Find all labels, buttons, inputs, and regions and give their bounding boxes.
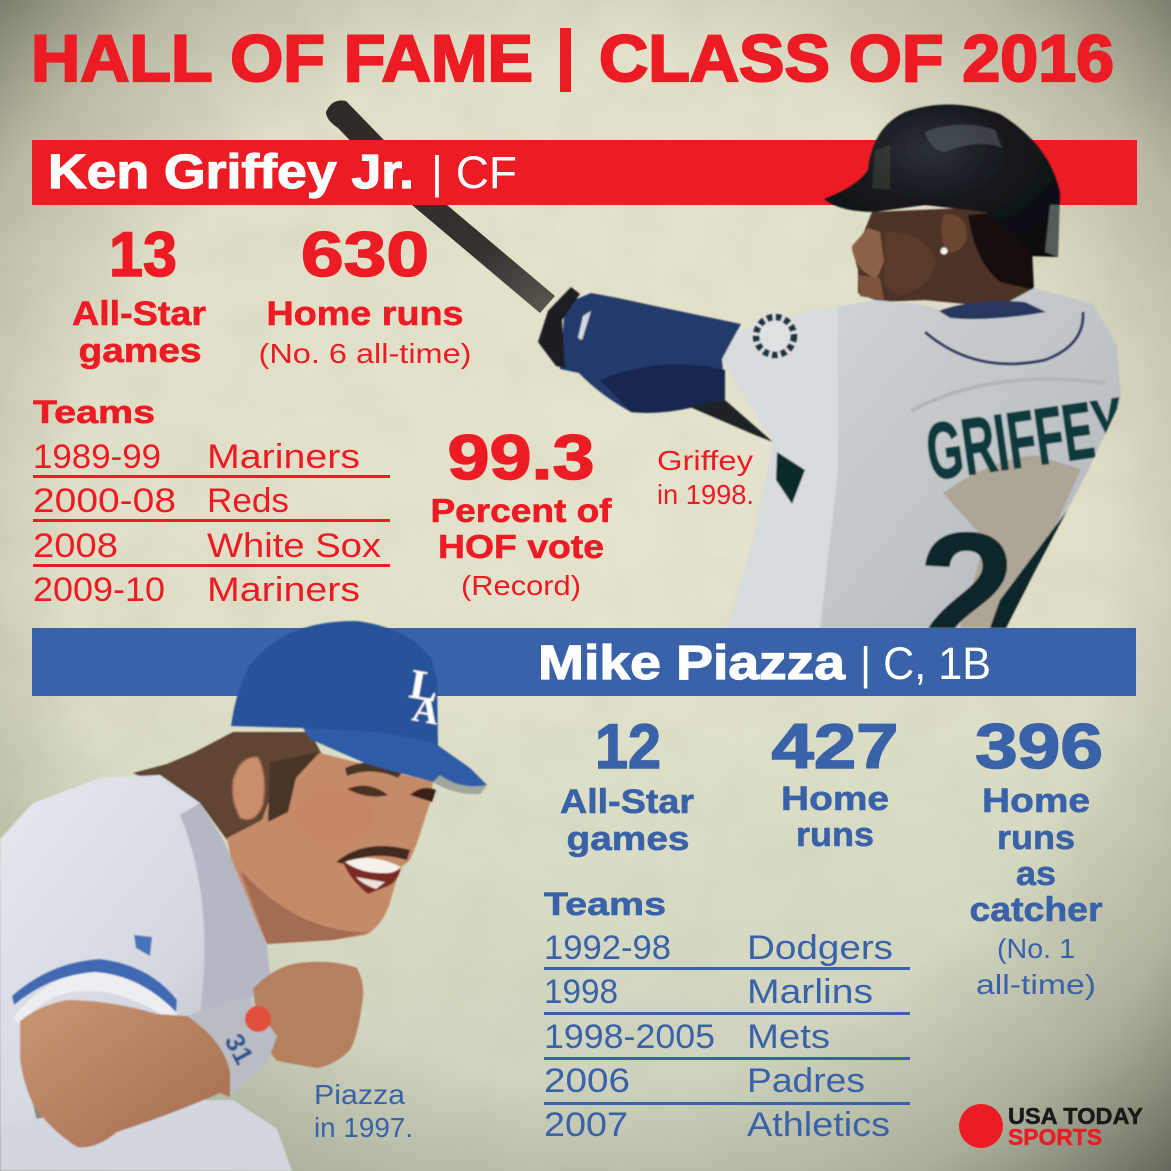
table: Piazza teams: 1998-2005	[544, 1018, 715, 1056]
sleeve stripe	[12, 959, 177, 1012]
caption: Griffey in 1998	[657, 445, 754, 510]
caption: Griffey in 1998: in 1998.	[657, 479, 754, 510]
stats: Piazza home runs as catcher: 396	[975, 712, 1103, 782]
cap crown	[231, 621, 438, 746]
jersey	[0, 775, 270, 1128]
teeth	[345, 858, 401, 873]
stats: Griffey HOF vote	[430, 423, 613, 601]
table: Griffey teams: 2008	[33, 527, 118, 565]
photo: Piazza crouching	[0, 621, 487, 1171]
photo: Griffey batting	[537, 104, 1121, 628]
glove	[538, 287, 580, 368]
table: Piazza teams: Mets	[747, 1018, 830, 1056]
mustache	[336, 846, 410, 864]
table: Piazza teams: Teams	[544, 886, 666, 922]
LA logo: A	[410, 688, 442, 732]
stats: Piazza home runs: 427	[772, 712, 898, 782]
wristband	[187, 996, 277, 1097]
logo: USA Today Sports: USA TODAY	[1008, 1103, 1143, 1129]
table: Piazza teams: Dodgers	[747, 929, 893, 967]
piping	[925, 312, 1083, 364]
stats: Piazza All-Star games: 12	[595, 712, 661, 782]
caption: Piazza in 1997: Piazza	[314, 1079, 405, 1110]
table: Piazza teams: Athletics	[747, 1106, 890, 1144]
stats: Griffey All-Star games: 13	[109, 220, 177, 290]
sponsor mark	[134, 935, 152, 956]
stats: Griffey home runs: 630	[301, 220, 429, 290]
wrist highlight	[578, 311, 591, 340]
logo: USA Today Sports: SPORTS	[1008, 1124, 1102, 1150]
neck and head	[852, 205, 1034, 306]
legs	[0, 1100, 292, 1171]
face	[227, 753, 433, 944]
sleeve patch	[751, 312, 799, 360]
stats: Piazza home runs: Home	[781, 780, 889, 818]
table: Griffey teams: White Sox	[207, 527, 381, 565]
jersey light panel	[722, 305, 838, 628]
stats: Piazza home runs as catcher: Home	[982, 782, 1090, 820]
earring	[940, 248, 948, 254]
stats: Piazza home runs as catcher: runs	[997, 819, 1075, 857]
table: Griffey teams: Mariners	[207, 571, 360, 609]
LA logo: L	[406, 662, 442, 712]
tan patch	[943, 455, 1081, 628]
banner: Ken Griffey Jr.: Ken Griffey Jr.	[48, 146, 414, 199]
table: Griffey teams: Reds	[207, 482, 289, 520]
eyebrow	[345, 762, 402, 778]
stats: Griffey All-Star games: games	[78, 332, 202, 370]
helmet decal	[872, 145, 890, 190]
jersey name	[924, 396, 1120, 628]
ear	[941, 214, 967, 252]
stats: Griffey HOF vote: Percent of	[430, 492, 613, 529]
jaw shadow	[240, 870, 372, 944]
table: Griffey teams: 2000-08	[33, 482, 176, 520]
arm	[20, 1000, 230, 1147]
table: Piazza teams	[544, 886, 910, 1144]
stats: Griffey HOF vote: HOF vote	[438, 528, 604, 565]
face highlight	[852, 228, 884, 280]
table: Griffey teams: Mariners	[207, 438, 360, 476]
table: Piazza teams: 1998	[544, 973, 618, 1011]
banner: Mike Piazza: Mike Piazza	[538, 637, 845, 690]
jersey number: 2	[918, 497, 1016, 689]
table: Griffey teams	[33, 394, 390, 609]
stats: Griffey HOF vote: 99.3	[448, 423, 594, 493]
jersey body	[722, 288, 1121, 628]
wristband logo	[245, 1006, 271, 1032]
table: Piazza teams: Marlins	[747, 973, 873, 1011]
front letters	[776, 452, 805, 504]
stats: Piazza home runs	[772, 712, 898, 854]
eye	[347, 786, 388, 797]
stats: Griffey HOF vote: (Record)	[461, 570, 581, 601]
banner: Ken Griffey Jr.: | CF	[431, 147, 517, 198]
table: Piazza teams: 2006	[544, 1062, 630, 1100]
bat	[326, 100, 555, 313]
table: Griffey teams: Teams	[33, 394, 155, 430]
stats: Piazza home runs as catcher: catcher	[970, 891, 1102, 929]
hair	[968, 210, 1034, 290]
sleeve hem	[13, 970, 177, 1025]
stats: Piazza All-Star games: All-Star	[560, 783, 694, 821]
stats: Griffey home runs: Home runs	[266, 295, 464, 333]
stats: Piazza All-Star games: games	[566, 820, 690, 858]
photo: Piazza crouching: 31	[219, 1029, 259, 1069]
side hair	[268, 752, 320, 822]
title: CLASS OF 2016	[599, 21, 1114, 95]
table: Piazza teams: 1992-98	[544, 929, 671, 967]
table: Griffey teams: 2009-10	[33, 571, 165, 609]
stats: Piazza home runs as catcher: all-time)	[976, 969, 1096, 1000]
second arm	[690, 400, 773, 442]
cheek	[295, 790, 375, 840]
logo: USA Today Sports	[959, 1103, 1143, 1150]
stats: Piazza home runs as catcher	[970, 712, 1103, 1000]
title	[31, 21, 1114, 95]
fist	[253, 962, 363, 1068]
stats: Piazza home runs as catcher: as	[1016, 855, 1056, 893]
banner: Ken Griffey Jr.	[32, 140, 1137, 205]
stats: Piazza home runs as catcher: (No. 1	[997, 933, 1075, 964]
title: HALL OF FAME	[31, 21, 533, 95]
navy sleeve	[560, 293, 741, 413]
table: Piazza teams: Padres	[747, 1062, 865, 1100]
name plate arc	[911, 379, 1105, 411]
helmet highlight	[925, 124, 1002, 152]
table: Piazza teams: 2007	[544, 1106, 628, 1144]
caption: Piazza in 1997: in 1997.	[314, 1112, 413, 1143]
collar	[939, 301, 1046, 319]
table: Griffey teams: 1989-99	[33, 438, 161, 476]
banner: Mike Piazza: | C, 1B	[860, 638, 991, 689]
stats: Griffey home runs	[258, 220, 472, 369]
stats: Piazza home runs: runs	[796, 816, 874, 854]
banner: Mike Piazza	[32, 628, 1136, 696]
stats: Griffey home runs: (No. 6 all-time)	[258, 338, 472, 369]
jersey side shade	[180, 803, 270, 1015]
caption: Piazza in 1997	[314, 1079, 413, 1143]
hair	[133, 732, 325, 840]
cap brim	[303, 728, 487, 794]
stats: Piazza All-Star games	[560, 712, 694, 858]
stats: Griffey All-Star games	[72, 220, 206, 370]
ear	[232, 757, 265, 820]
mouth	[343, 858, 401, 894]
caption: Griffey in 1998: Griffey	[657, 445, 753, 476]
stats: Griffey All-Star games: All-Star	[72, 295, 206, 333]
helmet	[824, 104, 1060, 257]
